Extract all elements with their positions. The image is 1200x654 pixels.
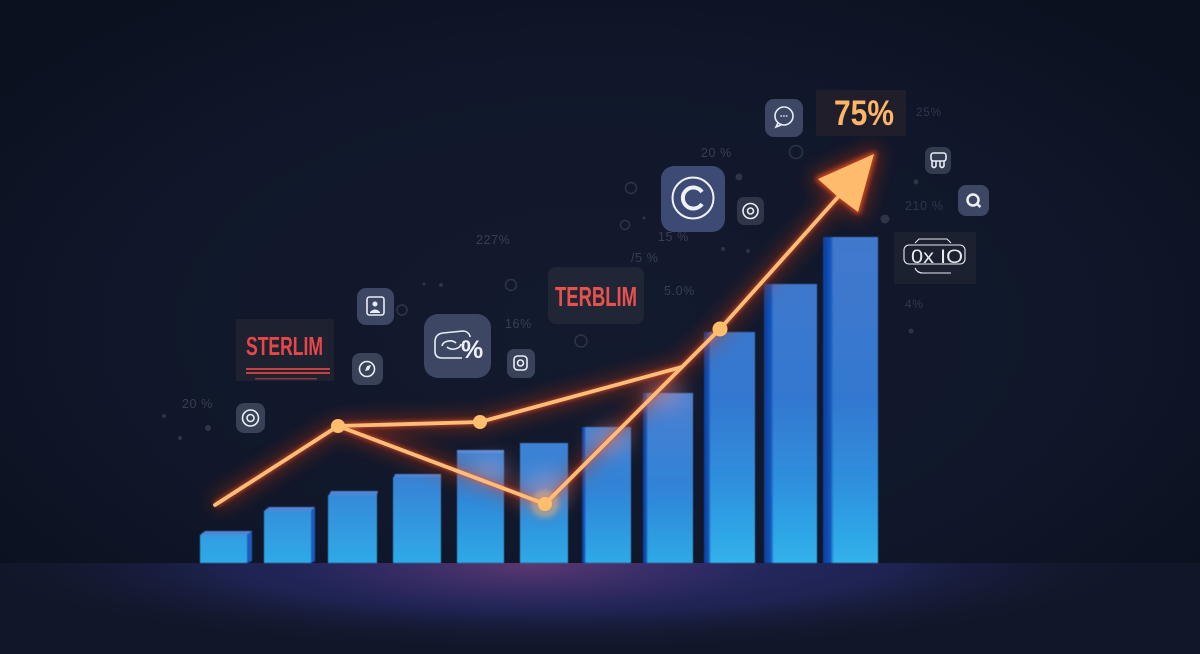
bar 9 bbox=[704, 332, 755, 563]
data point 3 bbox=[531, 490, 559, 518]
percentage labels: 4% bbox=[905, 297, 924, 311]
percentage labels: /5 % bbox=[631, 251, 658, 265]
icon: compass badge bbox=[352, 353, 383, 385]
data point 1 bbox=[331, 419, 345, 433]
decorative dots and rings bbox=[162, 146, 918, 440]
bar 4 bbox=[393, 474, 441, 563]
percentage labels: 15 % bbox=[658, 230, 689, 244]
bar 3 bbox=[328, 491, 378, 563]
percentage labels: 25% bbox=[916, 105, 942, 119]
percentage labels: 20 % bbox=[701, 146, 732, 160]
icon: instagram badge bbox=[507, 349, 535, 378]
icon: search badge bbox=[958, 185, 989, 216]
percentage labels: 5.0% bbox=[664, 284, 695, 298]
percentage labels: 210 % bbox=[905, 199, 943, 213]
data point 4 bbox=[712, 322, 728, 336]
panel: TERBLIM label bbox=[548, 267, 644, 324]
bar 6 bbox=[520, 443, 568, 563]
icon: home badge bbox=[236, 403, 265, 433]
bar 7 bbox=[582, 427, 631, 563]
bar 1 bbox=[200, 531, 252, 563]
icon: small at badge bbox=[737, 197, 764, 225]
arrowhead bbox=[818, 154, 874, 212]
icon: percent badge bbox=[424, 314, 491, 378]
icon: chat badge bbox=[765, 99, 803, 137]
bar 5 bbox=[457, 450, 504, 563]
bar 11 bbox=[823, 237, 878, 563]
bar chart bbox=[200, 237, 878, 563]
icon: device badge bbox=[925, 147, 951, 174]
icon: percent badge: % bbox=[461, 336, 483, 364]
percentage labels: 20 % bbox=[182, 397, 213, 411]
panel: STERLIM label: STERLIM bbox=[246, 331, 323, 361]
percentage labels: 16% bbox=[505, 317, 532, 331]
bar 2 bbox=[264, 507, 315, 563]
bar haze bbox=[470, 383, 685, 510]
panel: 75% callout bbox=[816, 90, 906, 136]
icon: profile badge bbox=[357, 288, 394, 325]
panel: TERBLIM label: TERBLIM bbox=[555, 281, 637, 312]
bar 8 bbox=[643, 393, 693, 563]
bar 10 bbox=[764, 284, 817, 563]
panel: 0x10 label bbox=[894, 232, 976, 284]
percentage labels: 227% bbox=[476, 233, 510, 247]
growth line with glow bbox=[215, 154, 874, 518]
panel: 75% callout: 75% bbox=[834, 94, 894, 133]
percentage labels bbox=[182, 105, 943, 411]
icon: copyright badge bbox=[661, 166, 725, 232]
data point 2 bbox=[473, 415, 487, 429]
panel: STERLIM label bbox=[236, 319, 334, 381]
panel: 0x10 label: 0x IO bbox=[911, 247, 963, 268]
